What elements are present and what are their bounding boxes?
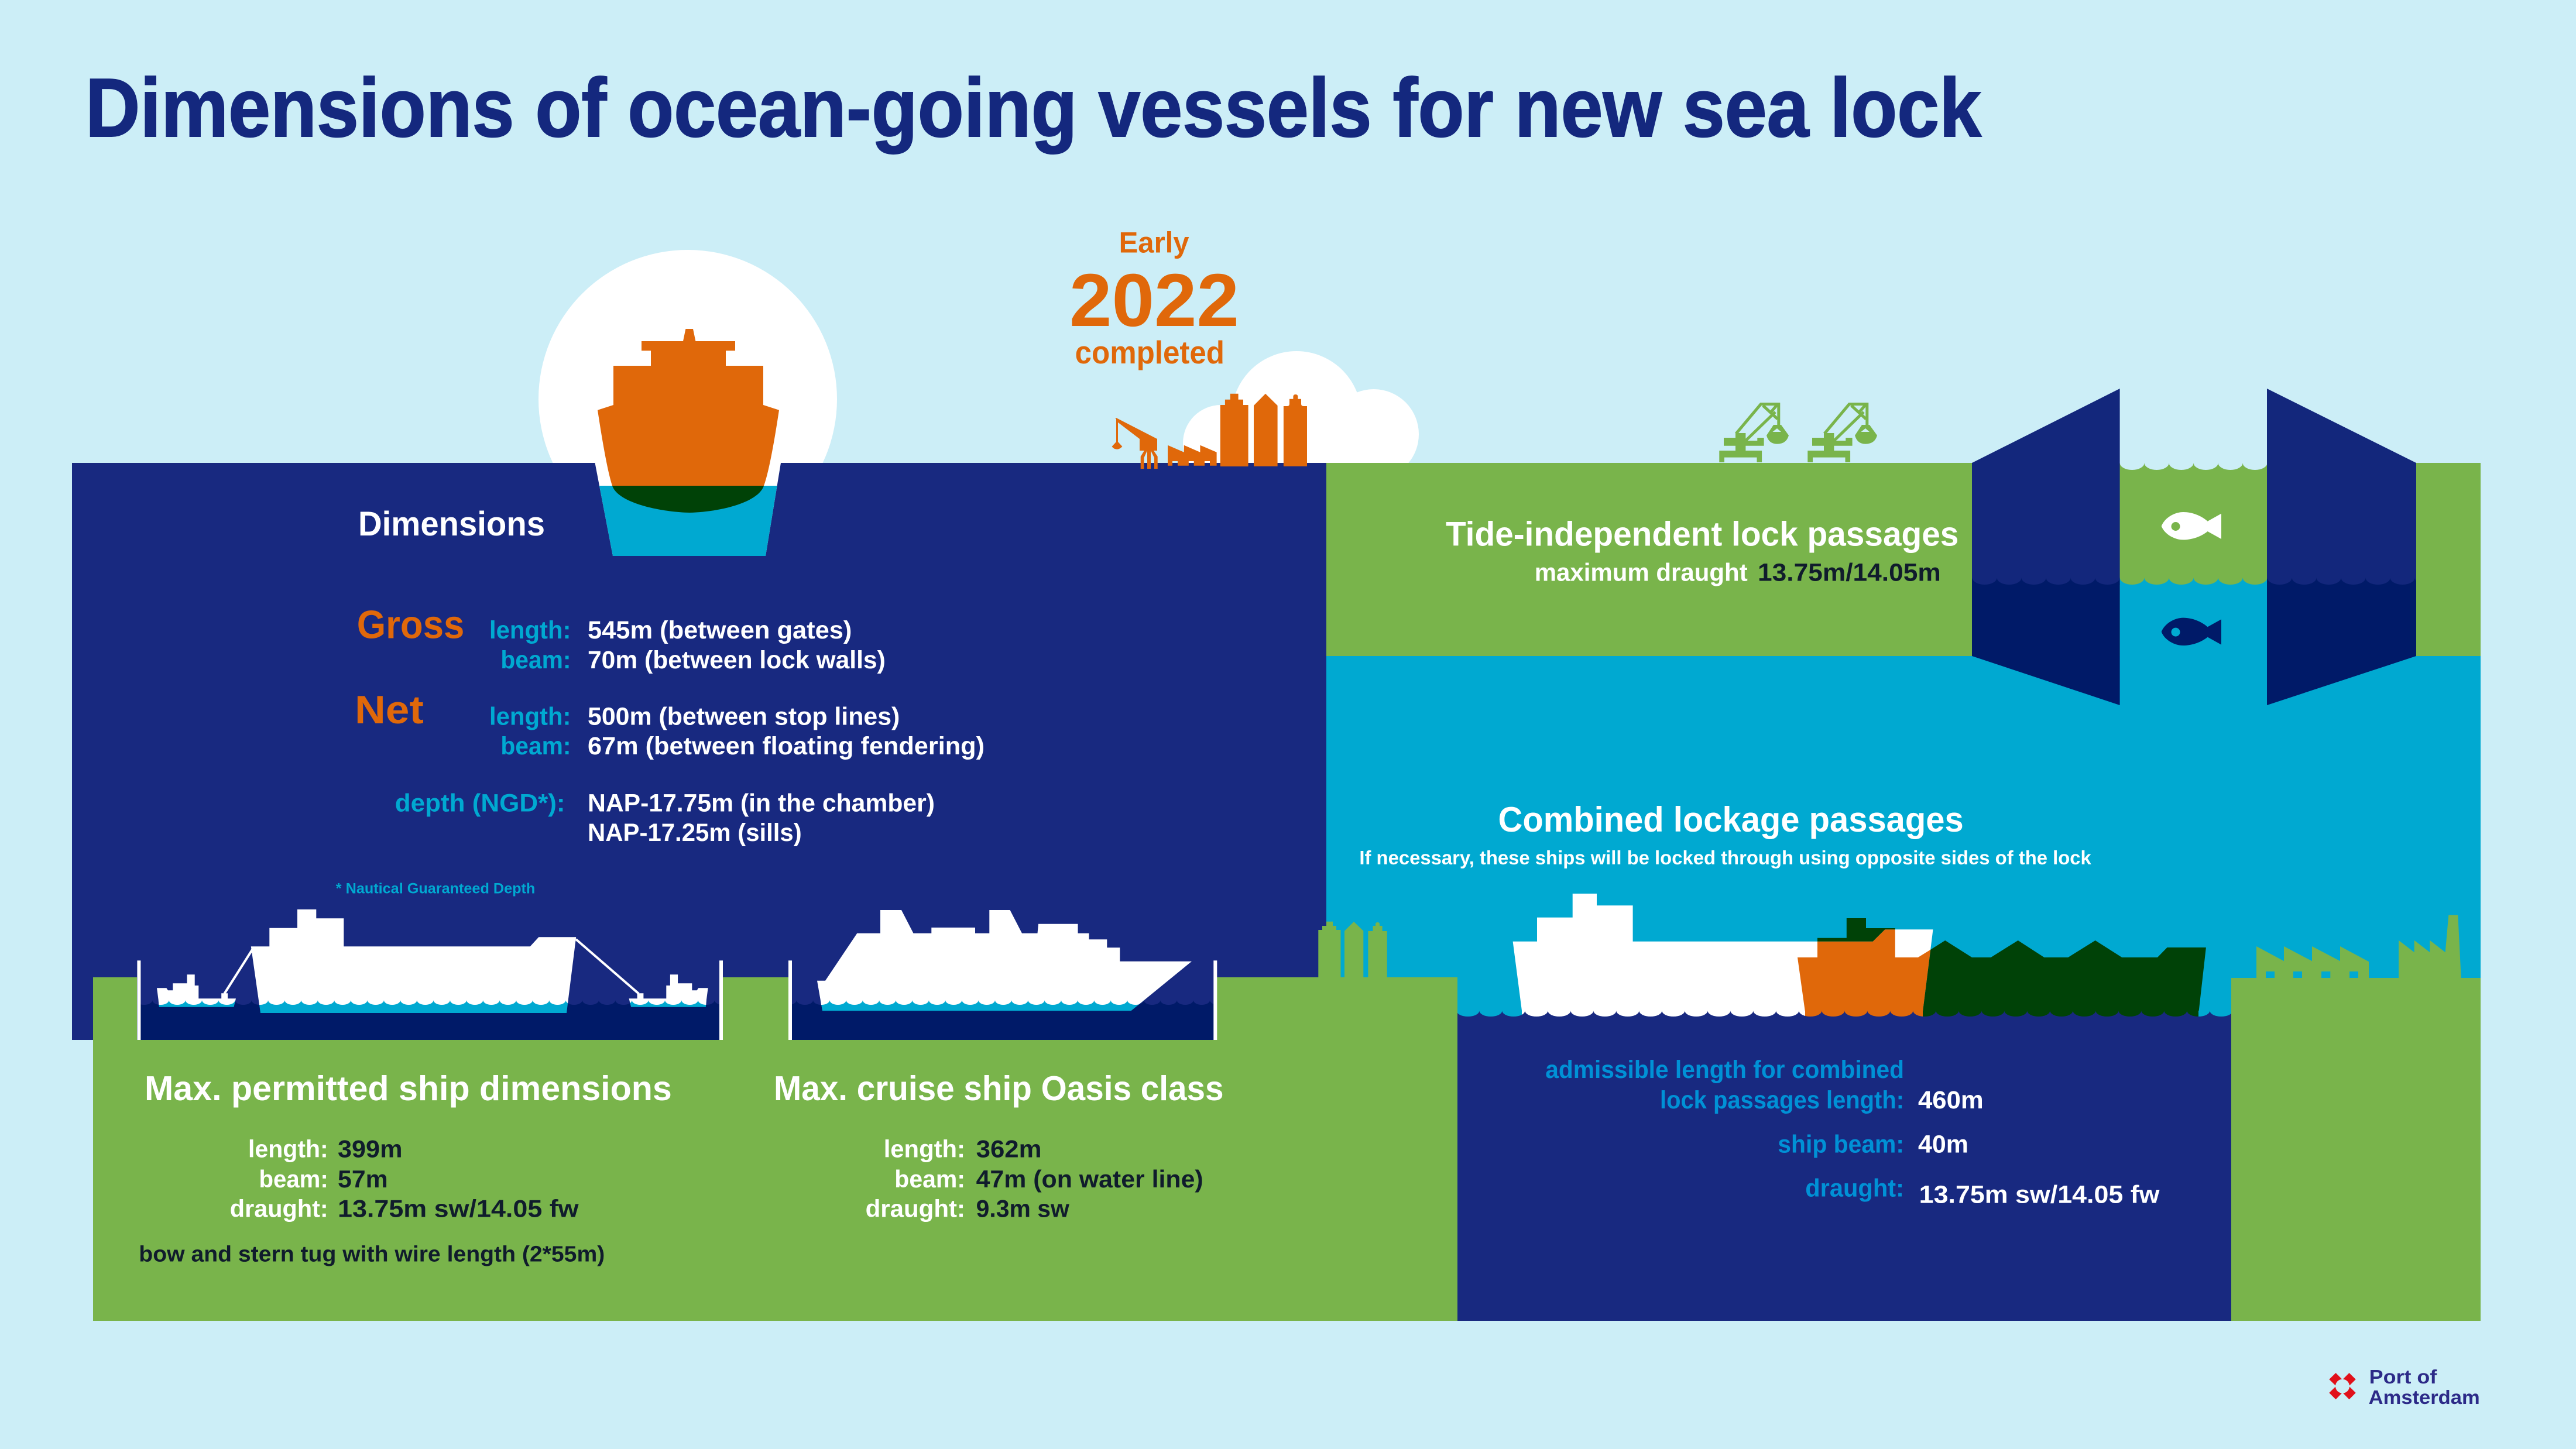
- icon: right gate: [2267, 389, 2416, 705]
- text block: max cruise ship Oasis class: 9.3m sw: [976, 1194, 1069, 1222]
- dock walls: [788, 960, 792, 1040]
- panel: lower green right: [2231, 978, 2481, 1321]
- text block: combined data: 13.75m sw/14.05 fw: [1919, 1181, 2160, 1209]
- icon: crane 2: [1807, 404, 1877, 462]
- text block: combined data: lock passages length:: [1660, 1086, 1904, 1114]
- heading: dimensions: Dimensions: [358, 505, 545, 543]
- text block: combined lockage passages: [1359, 800, 2091, 868]
- text block: tide-independent lock passages: [1446, 516, 1958, 587]
- gross beam row: 70m (between lock walls): [588, 646, 886, 674]
- icon: dark green ship: [1923, 940, 2206, 1011]
- dock walls: [137, 960, 140, 1040]
- depth rows: NAP-17.75m (in the chamber): [588, 789, 935, 817]
- icon: small dark green ship top: [1817, 918, 1895, 942]
- text block: combined data: draught:: [1805, 1174, 1904, 1202]
- text block: max cruise ship Oasis class: Max. cruise ship Oasis class: [774, 1069, 1223, 1108]
- gross length row: length:: [489, 616, 571, 644]
- text block: combined lockage passages: If necessary, these ships will be locked through using opposite sides of the lock: [1359, 847, 2091, 868]
- text block: max permitted ship dimensions: length:: [248, 1135, 328, 1163]
- icon: orange factory: [1168, 445, 1217, 466]
- text block: max permitted ship dimensions: 57m: [338, 1165, 388, 1193]
- sun circle behind ship: [538, 250, 837, 548]
- text block: combined data: 460m: [1918, 1086, 1984, 1114]
- icon: orange tower 1: [1220, 394, 1248, 466]
- icon: orange ship: [1798, 929, 1930, 1011]
- icon: orange tower 2: [1254, 394, 1278, 466]
- icon: submerged hull: [612, 486, 764, 513]
- dock: cruise ship: [788, 910, 1217, 1040]
- gross label: Gross: [357, 603, 464, 647]
- text block: combined data: 40m: [1918, 1130, 1968, 1158]
- completion date text: completed: [1075, 334, 1224, 370]
- tow wires: [224, 939, 639, 994]
- text block: tide-independent lock passages: Tide-independent lock passages: [1446, 516, 1958, 554]
- icon: orange ship front view: [598, 329, 779, 486]
- gross beam row: beam:: [500, 646, 571, 674]
- panel: lower green left: [93, 977, 1457, 1321]
- icon: cruise ship: [817, 910, 1192, 1011]
- panel: tide-independent green background: [1326, 463, 2481, 656]
- text block: max permitted ship dimensions: Max. permitted ship dimensions: [145, 1069, 672, 1108]
- completion date text: 2022: [1069, 259, 1239, 342]
- net length row: length:: [489, 702, 571, 730]
- text block: combined data: ship beam:: [1778, 1130, 1904, 1158]
- icon: white fish: [2162, 512, 2221, 540]
- net beam row: beam:: [500, 732, 571, 760]
- icon: orange tower 3: [1284, 394, 1307, 466]
- logo wordmark: Amsterdam: [2369, 1386, 2480, 1408]
- icon: green factories: [2256, 915, 2461, 978]
- text block: max permitted ship dimensions: 13.75m sw/14.05 fw: [338, 1194, 579, 1222]
- completion date text: [1069, 226, 1239, 370]
- depth rows: NAP-17.25m (sills): [588, 819, 802, 847]
- icon: left tug: [157, 974, 236, 1007]
- text block: dimensions: [336, 505, 985, 897]
- icon: logo diamonds: [2329, 1373, 2356, 1399]
- icon: green towers: [1318, 922, 1387, 977]
- depth rows: [395, 789, 935, 847]
- text block: tide-independent lock passages: 13.75m/14.05m: [1758, 559, 1941, 587]
- dock: max permitted ship: [137, 909, 723, 1040]
- icon: green cranes: [1719, 404, 1877, 462]
- text block: max permitted ship dimensions: bow and stern tug with wire length (2*55m): [139, 1242, 605, 1266]
- net length row: 500m (between stop lines): [588, 702, 900, 730]
- lock gates and water levels: [1972, 389, 2416, 705]
- waves under ships: [1457, 1011, 2231, 1017]
- cloud: [1183, 351, 1419, 481]
- panel: lower navy combined data: [1457, 1017, 2231, 1321]
- text block: combined lockage passages: Combined lockage passages: [1498, 800, 1964, 839]
- text block: max permitted ship dimensions: [139, 1069, 672, 1266]
- completion date text: Early: [1119, 226, 1189, 259]
- text block: max cruise ship Oasis class: [774, 1069, 1223, 1222]
- gross length row: 545m (between gates): [588, 616, 852, 644]
- text block: max permitted ship dimensions: draught:: [230, 1194, 328, 1222]
- panel: navy dimensions background: [72, 463, 1327, 1040]
- logo wordmark: [2369, 1366, 2480, 1408]
- text block: max cruise ship Oasis class: draught:: [866, 1194, 965, 1222]
- net beam row: 67m (between floating fendering): [588, 732, 985, 760]
- lock cross-section with front-view ship: [595, 329, 781, 556]
- logo: Port of Amsterdam: [2329, 1366, 2480, 1408]
- icon: crane 1: [1719, 404, 1789, 462]
- text block: max cruise ship Oasis class: length:: [884, 1135, 965, 1163]
- text block: max cruise ship Oasis class: 47m (on water line): [976, 1165, 1203, 1193]
- text block: max permitted ship dimensions: beam:: [259, 1165, 328, 1193]
- title: Dimensions of ocean-going vessels for new sea lock: [85, 61, 1982, 154]
- text block: max cruise ship Oasis class: 362m: [976, 1135, 1042, 1163]
- text block: combined data: admissible length for combined: [1545, 1056, 1904, 1084]
- combined lockage ships: [1457, 894, 2231, 1017]
- icon: navy fish: [2162, 618, 2221, 645]
- depth rows: depth (NGD*):: [395, 789, 565, 817]
- icon: orange crane: [1112, 418, 1158, 469]
- icon: white ship: [1513, 894, 1933, 1011]
- text block: tide-independent lock passages: maximum draught: [1535, 559, 1748, 587]
- icon: right tug: [629, 974, 708, 1007]
- text block: max cruise ship Oasis class: beam:: [894, 1165, 965, 1193]
- footnote: * Nautical Guaranteed Depth: [336, 880, 535, 897]
- icon: main ship: [251, 909, 576, 1013]
- icon: left gate: [1972, 389, 2120, 705]
- net label: Net: [355, 688, 424, 732]
- logo wordmark: Port of: [2369, 1366, 2437, 1388]
- icon: orange port skyline: [1112, 394, 1307, 469]
- text block: combined data: [1545, 1056, 2160, 1209]
- panel: combined lockage blue water: [1326, 656, 2481, 1017]
- text block: max permitted ship dimensions: 399m: [338, 1135, 403, 1163]
